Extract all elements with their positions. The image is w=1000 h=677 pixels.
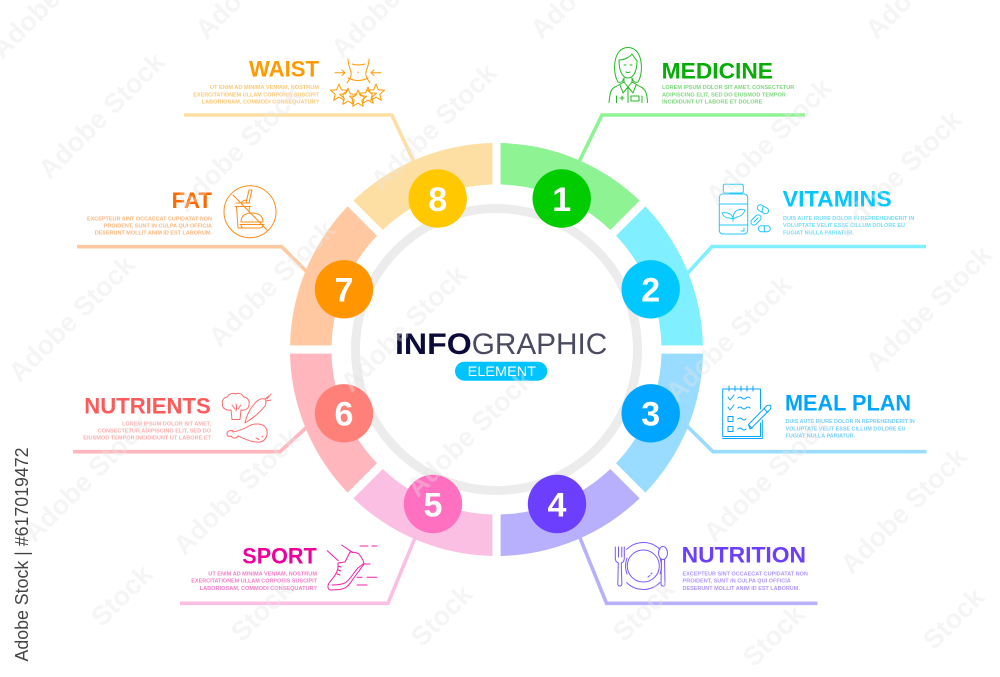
heading: MEAL PLAN (785, 391, 911, 416)
panel: meal plan (723, 386, 915, 439)
body text: PROIDENT, SUNT IN CULPA QUI OFFICIA (104, 224, 213, 230)
badge 4: 4 (548, 486, 567, 524)
body text: VOLUPTATE VELIT ESSE CILLUM DOLORE EU (786, 426, 906, 432)
watermarks: Stock (737, 598, 811, 672)
segment 6 (290, 354, 377, 493)
icon: plate and cutlery (615, 543, 668, 589)
watermarks: Stock (405, 578, 479, 652)
icon: doctor (609, 48, 648, 102)
body text (662, 85, 795, 105)
panel: sport (191, 543, 377, 592)
leader lines (73, 115, 926, 603)
leader: nutrients (73, 425, 309, 452)
badge 5: 5 (424, 486, 442, 524)
leader: vitamins (686, 246, 926, 275)
inner grey ring (356, 208, 638, 490)
body text (783, 216, 914, 236)
badge 3: 3 (641, 396, 660, 434)
watermarks: Adobe Stock (698, 409, 836, 548)
badge 1: 1 (552, 181, 571, 219)
icon: waist with stars (330, 59, 385, 106)
panel: vitamins (719, 184, 914, 236)
badge 6: 6 (335, 396, 353, 434)
body text: EXCEPTEUR SINT OCCAECAT CUPIDATAT NON (682, 571, 808, 577)
body text: EXERCITATIONEM ULLAM CORPORIS SUSCIPIT (193, 92, 319, 98)
body text (83, 421, 211, 441)
body text: VOLUPTATE VELIT ESSE CILLUM DOLORE EU (783, 223, 905, 229)
body text (786, 419, 915, 439)
body text: DESERUNT MOLLIT ANIM ID EST LABORUM. (682, 586, 800, 592)
icon: no fast food (224, 186, 276, 238)
watermarks: Adobe Stock (33, 46, 171, 185)
watermarks: Stock (85, 558, 159, 632)
watermarks: Adobe Stock (860, 239, 998, 378)
leader: sport (180, 533, 417, 603)
badge 4 (528, 475, 586, 533)
body text: INCIDIDUNT UT LABORE ET DOLORE (662, 99, 762, 105)
body text: CONSECTETUR ADIPISCING ELIT, SED DO (98, 428, 211, 434)
panel: waist (193, 57, 385, 106)
watermarks: Stock (607, 573, 681, 647)
body text: ADIPISCING ELIT, SED DO EIUSMOD TEMPOR (662, 92, 787, 98)
body text (87, 216, 213, 237)
badge 6 (315, 384, 373, 442)
heading: MEDICINE (662, 58, 773, 83)
panel: nutrients (83, 393, 271, 442)
body text: EIUSMOD TEMPOR INCIDIDUNT UT LABORE ET (83, 435, 211, 441)
badge 8: 8 (428, 181, 447, 219)
leader: waist (184, 115, 415, 164)
element label: ELEMENT (468, 363, 536, 379)
watermarks: Adobe Stock (170, 79, 308, 218)
leader: fat (77, 247, 308, 273)
badge 1 (532, 169, 591, 228)
body text: EXCEPTEUR SINT OCCAECAT CUPIDATAT NON (87, 216, 212, 222)
heading: WAIST (249, 57, 320, 82)
leader: meal plan (686, 425, 926, 452)
body text: LABORIOSAM, COMMODI CONSEQUATUR? (200, 586, 317, 592)
leader: nutrition (578, 533, 818, 603)
body text: UT ENIM AD MINIMA VENIAM, NOSTRUM (208, 571, 317, 577)
title: graphic: GRAPHIC (472, 328, 607, 361)
watermarks: Adobe Stock (335, 259, 473, 398)
panel: medicine (609, 48, 795, 105)
heading: VITAMINS (783, 187, 892, 212)
adobe stock credit: Adobe Stock | #617019472 (11, 448, 32, 662)
badge 7 (315, 260, 373, 318)
body text (682, 571, 808, 592)
icon: meal plan checklist (723, 386, 771, 438)
badge 3 (622, 384, 680, 442)
segment 7 (290, 206, 377, 345)
body text (193, 85, 319, 105)
watermarks: Adobe Stock (203, 214, 341, 353)
center title (395, 328, 607, 381)
badge 8 (408, 169, 467, 228)
body text: DUIS AUTE IRURE DOLOR IN REPREHENDERIT IN (786, 419, 915, 425)
panel: nutrition (615, 543, 808, 592)
watermarks: Adobe Stock (700, 72, 838, 211)
body text: UT ENIM AD MINIMA VENIAM, NOSTRUM (210, 85, 319, 91)
watermarks: Adobe Stock (401, 364, 539, 503)
body text: DESERUNT MOLLIT ANIM ID EST LABORUM. (95, 231, 212, 237)
icon: vitamin bottle and pills (719, 184, 770, 234)
watermarks: Adobe Stock (835, 441, 973, 580)
body text: FUGIAT NULLA PARIATUR. (786, 433, 856, 439)
leader: medicine (578, 115, 805, 164)
body text: PROIDENT, SUNT IN CULPA QUI OFFICIA (682, 579, 792, 585)
heading: SPORT (242, 543, 317, 568)
icon: broccoli, carrot, drumstick (222, 393, 271, 442)
body text: LOREM IPSUM DOLOR SIT AMET, CONSECTETUR (662, 85, 795, 91)
body text: DUIS AUTE IRURE DOLOR IN REPREHENDERIT IN (783, 216, 914, 222)
badge 2: 2 (641, 272, 660, 310)
watermarks: Adobe Stock (18, 409, 156, 548)
body text: LOREM IPSUM DOLOR SIT AMET, (122, 421, 211, 427)
body text (191, 571, 317, 592)
body text: EXERCITATIONEM ULLAM CORPORIS SUSCIPIT (191, 579, 317, 585)
body text: FUGIAT NULLA PARIATUR. (783, 230, 854, 236)
number badges (315, 169, 680, 533)
segment 3 (616, 354, 703, 493)
watermarks: Adobe Stock (830, 104, 968, 243)
watermarks: Adobe Stock (3, 249, 141, 388)
badge 2 (622, 260, 680, 318)
watermarks: Stock (225, 573, 299, 647)
ring chart (290, 143, 703, 556)
title: info: INFO (395, 328, 472, 361)
badge 5 (404, 475, 462, 533)
panel: fat (87, 186, 276, 238)
body text: LABORIOSAM, COMMODI CONSEQUATUR? (202, 99, 319, 105)
segment 2 (616, 206, 703, 345)
watermarks: Adobe Stock (365, 57, 503, 196)
watermarks: Stock (917, 581, 991, 655)
badge 7: 7 (335, 272, 353, 310)
element pill (455, 362, 547, 381)
watermarks: Adobe Stock (168, 422, 306, 561)
segment 4 (501, 469, 640, 556)
heading: NUTRIENTS (84, 393, 211, 418)
segment 8 (353, 143, 492, 230)
segment 5 (353, 469, 492, 556)
watermarks: Adobe Stock (660, 269, 798, 408)
heading: FAT (172, 188, 213, 213)
icon: running shoe (327, 545, 377, 590)
segment 1 (501, 143, 640, 230)
heading: NUTRITION (682, 543, 806, 568)
